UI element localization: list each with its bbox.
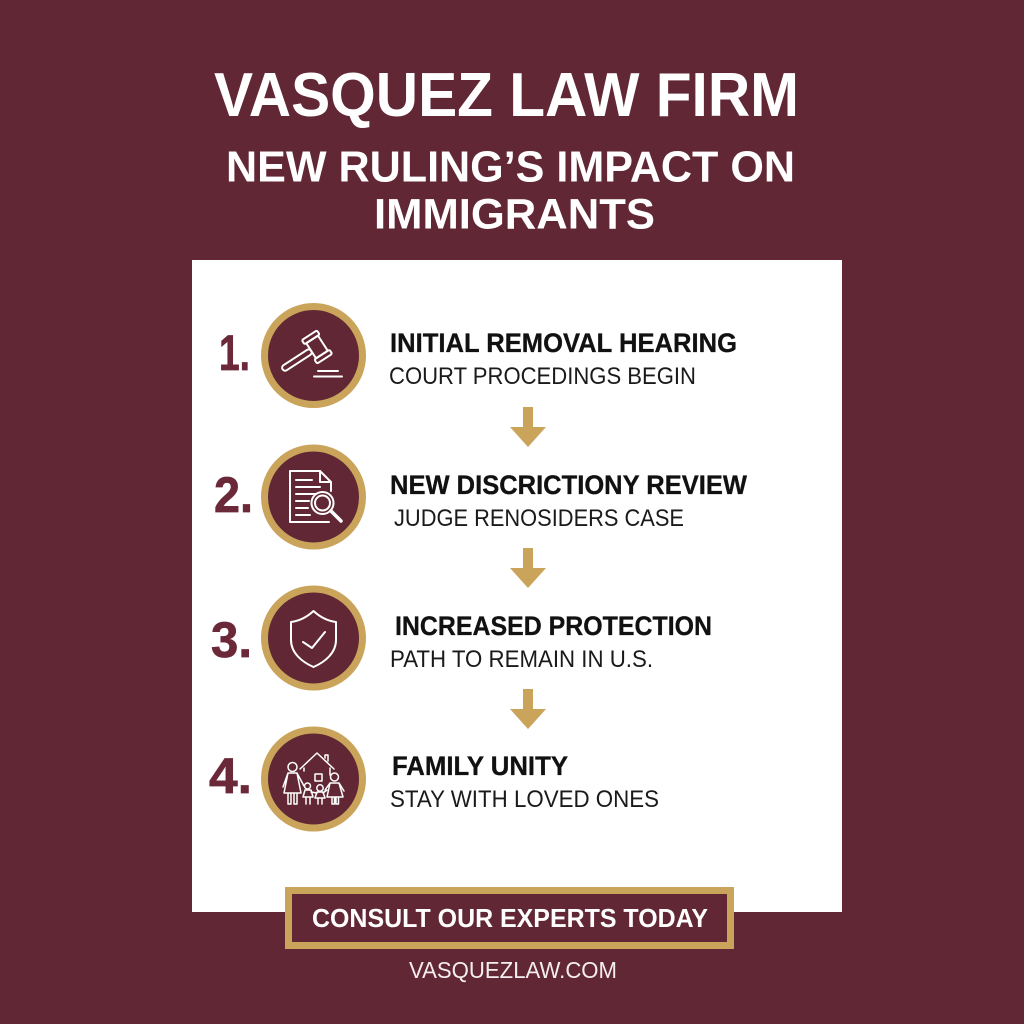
- icon: shield with check: [264, 589, 362, 687]
- website url: VASQUEZLAW.COM: [409, 957, 617, 983]
- subtitle: NEW RULING’S IMPACT ON: [226, 142, 795, 192]
- step 4 number: 4.: [209, 748, 252, 804]
- step 3 description: PATH TO REMAIN IN U.S.: [390, 646, 653, 673]
- step 3: [211, 589, 712, 687]
- subtitle: [226, 142, 795, 238]
- title: firm name: VASQUEZ LAW FIRM: [214, 61, 799, 130]
- step 1 description: COURT PROCEDINGS BEGIN: [389, 363, 696, 390]
- panel: white steps card: [192, 260, 842, 912]
- arrow 1 to 2: [510, 407, 546, 447]
- icon: document with magnifier: [264, 448, 362, 546]
- icon: family and house: [264, 730, 362, 828]
- step 4: [209, 730, 659, 828]
- arrow 3 to 4: [510, 689, 546, 729]
- step 1: [219, 306, 737, 404]
- step 2 number: 2.: [214, 467, 253, 523]
- call to action button: [288, 890, 730, 946]
- step 4 heading: FAMILY UNITY: [392, 751, 568, 781]
- step 3 heading: INCREASED PROTECTION: [395, 611, 712, 641]
- arrow 2 to 3: [510, 548, 546, 588]
- subtitle: IMMIGRANTS: [374, 190, 655, 238]
- step 2: [214, 448, 747, 546]
- step 4 description: STAY WITH LOVED ONES: [390, 786, 659, 813]
- icon: gavel: [264, 306, 362, 404]
- step 1 number: 1.: [219, 325, 250, 381]
- step 2 description: JUDGE RENOSIDERS CASE: [394, 505, 684, 532]
- call to action button: CONSULT OUR EXPERTS TODAY: [312, 903, 708, 933]
- step 1 heading: INITIAL REMOVAL HEARING: [390, 328, 737, 358]
- step 2 heading: NEW DISCRICTIONY REVIEW: [390, 470, 747, 500]
- step 3 number: 3.: [211, 612, 252, 668]
